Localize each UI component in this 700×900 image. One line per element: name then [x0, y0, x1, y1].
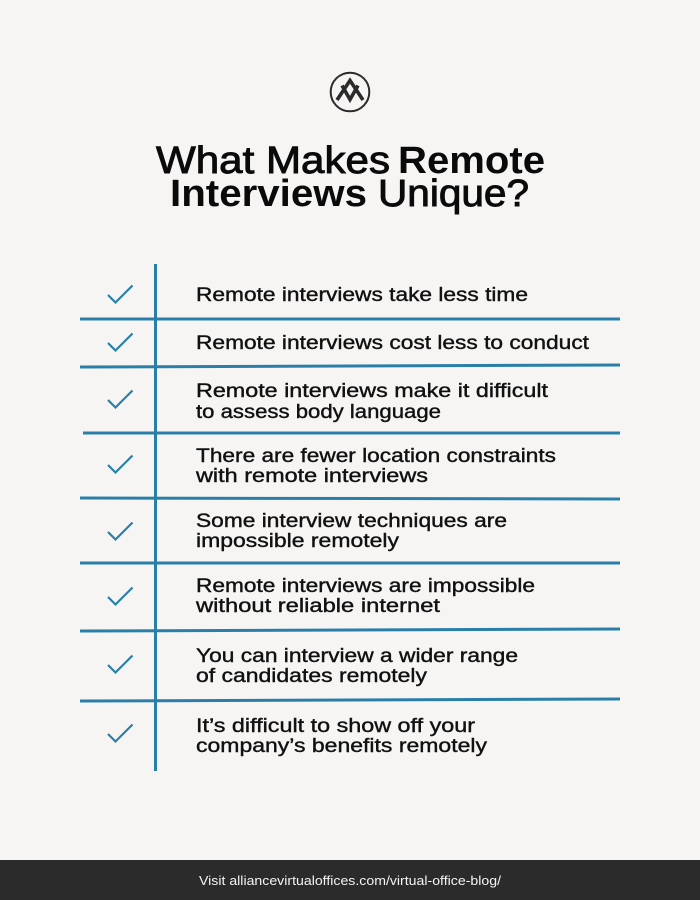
- row 1 text: Remote interviews take less time: [196, 284, 528, 306]
- row 6 text: without reliable internet: [195, 595, 441, 617]
- row 7 text: [196, 645, 518, 687]
- row 4 text: There are fewer location constraints: [196, 445, 556, 467]
- row 8 text: It’s difficult to show off your: [196, 715, 476, 737]
- row 3 text: [196, 380, 549, 423]
- title: [156, 140, 545, 215]
- row 2 text: Remote interviews cost less to conduct: [196, 332, 590, 354]
- row 7 text: You can interview a wider range: [196, 645, 518, 667]
- row 6 text: [195, 575, 535, 617]
- check icons: [108, 286, 132, 742]
- row 5 text: Some interview techniques are: [196, 510, 507, 532]
- table grid lines: [80, 264, 620, 771]
- row 8 text: [196, 715, 487, 757]
- icon: logo: [331, 73, 369, 111]
- footer: [0, 860, 700, 900]
- row 5 text: impossible remotely: [196, 530, 399, 552]
- title: Unique?: [378, 173, 529, 215]
- row 5 text: [196, 510, 507, 552]
- footer: Visit alliancevirtualoffices.com/virtual-office-blog/: [199, 873, 501, 888]
- row 7 text: of candidates remotely: [196, 665, 427, 687]
- title: Remote: [398, 140, 545, 182]
- row 4 text: with remote interviews: [195, 465, 428, 487]
- row 6 text: Remote interviews are impossible: [196, 575, 535, 597]
- title: Interviews: [170, 173, 367, 215]
- row 3 text: Remote interviews make it difficult: [196, 380, 549, 402]
- row 3 text: to assess body language: [196, 401, 441, 423]
- row 4 text: [195, 445, 556, 487]
- row 8 text: company’s benefits remotely: [196, 735, 487, 757]
- title: What Makes: [156, 140, 390, 182]
